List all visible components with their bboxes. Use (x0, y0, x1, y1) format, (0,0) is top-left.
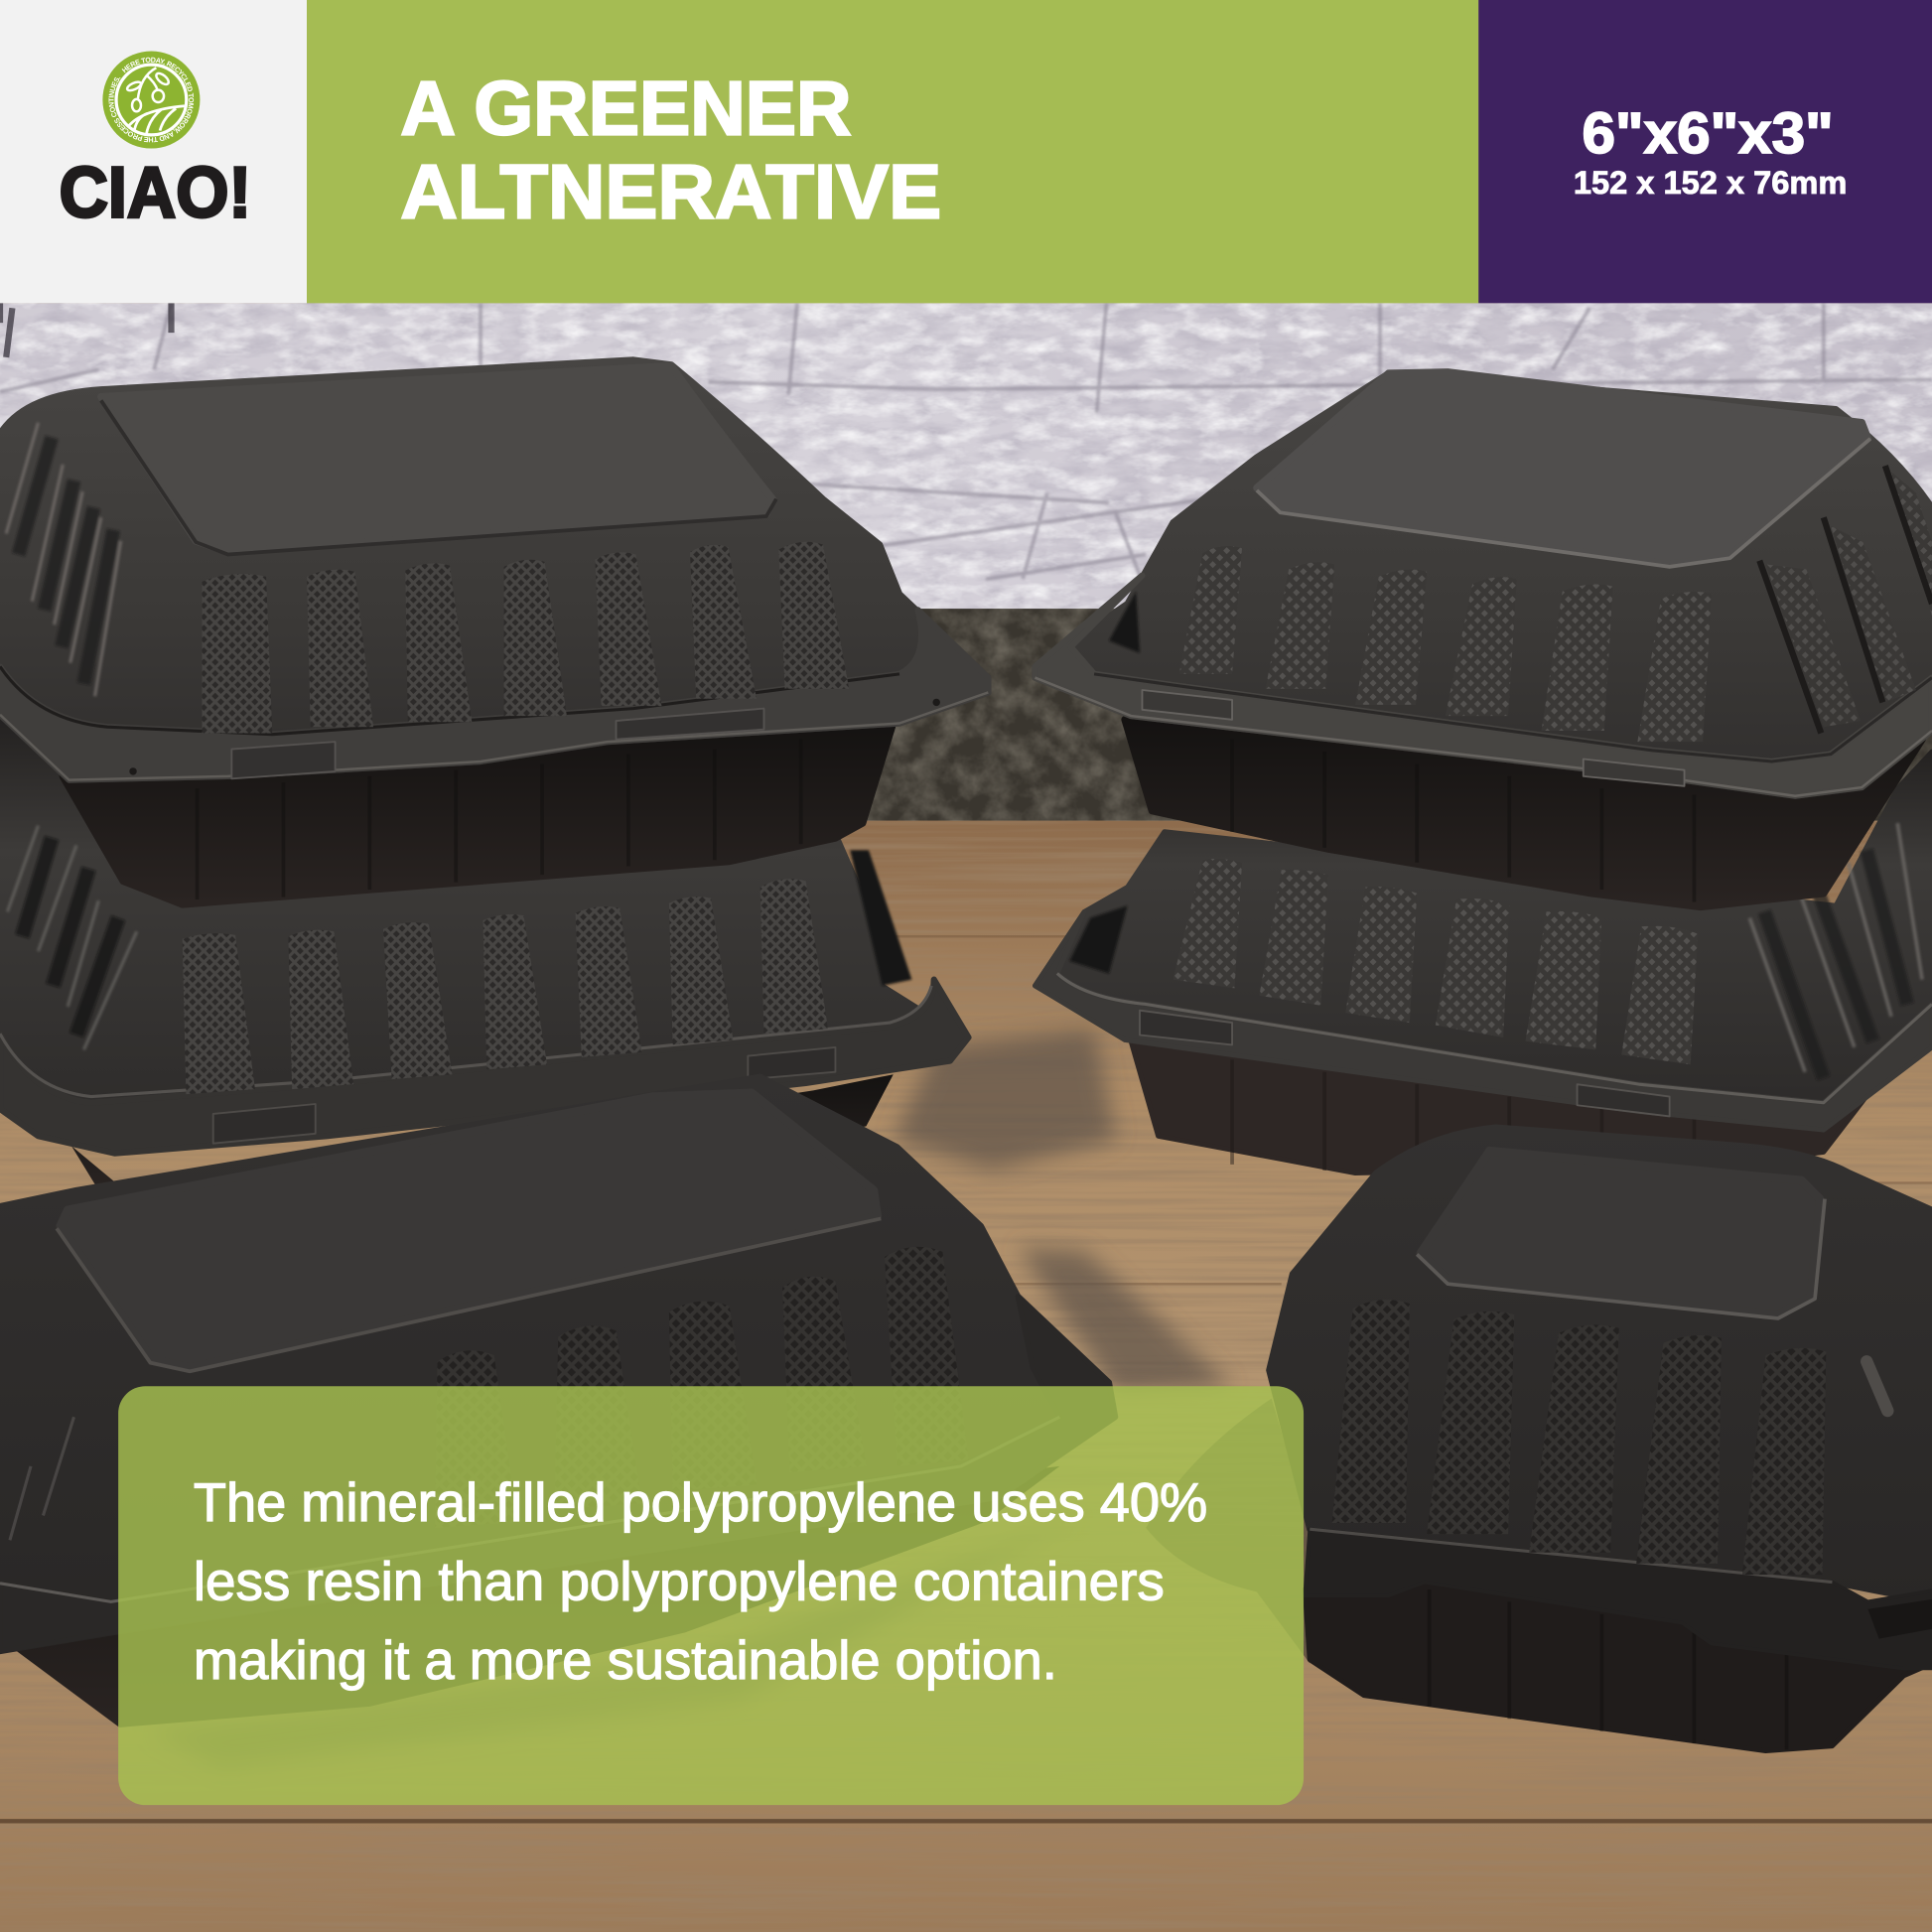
header panel: title (307, 0, 1478, 303)
callout: sustainability statement: making it a more sustainable option. (194, 1630, 1057, 1691)
header panel: dimensions: 6"x6"x3" (1583, 101, 1834, 166)
wooden floor (0, 813, 1932, 1932)
logo wordmark: CIAO! (60, 153, 251, 232)
shadows on wood (148, 1029, 1232, 1768)
header panel: title: ALTNERATIVE (400, 150, 941, 235)
container: right stack upper (1035, 372, 1932, 906)
icon: recycled olive badge: HERE TODAY, RECYCLED TOMORROW, AND THE PROCESS CONTINUES. (109, 58, 195, 143)
header panel: dimensions (1478, 0, 1932, 303)
callout: sustainability statement: less resin than polypropylene containers (194, 1552, 1165, 1612)
container: front left (0, 1077, 1115, 1727)
header panel: logo (0, 0, 307, 304)
white painted brick wall (0, 303, 1932, 617)
container: right stack lower (1035, 752, 1932, 1173)
dark brick wall base (0, 609, 1932, 821)
container: left stack upper (0, 359, 988, 904)
callout: sustainability statement (118, 1386, 1304, 1805)
header panel: dimensions: 152 x 152 x 76mm (1574, 165, 1847, 201)
container: front right (1146, 1128, 1932, 1751)
header panel: title: A GREENER (400, 66, 852, 151)
callout: sustainability statement: The mineral-filled polypropylene uses 40% (194, 1472, 1207, 1533)
container: left stack lower (0, 721, 968, 1190)
